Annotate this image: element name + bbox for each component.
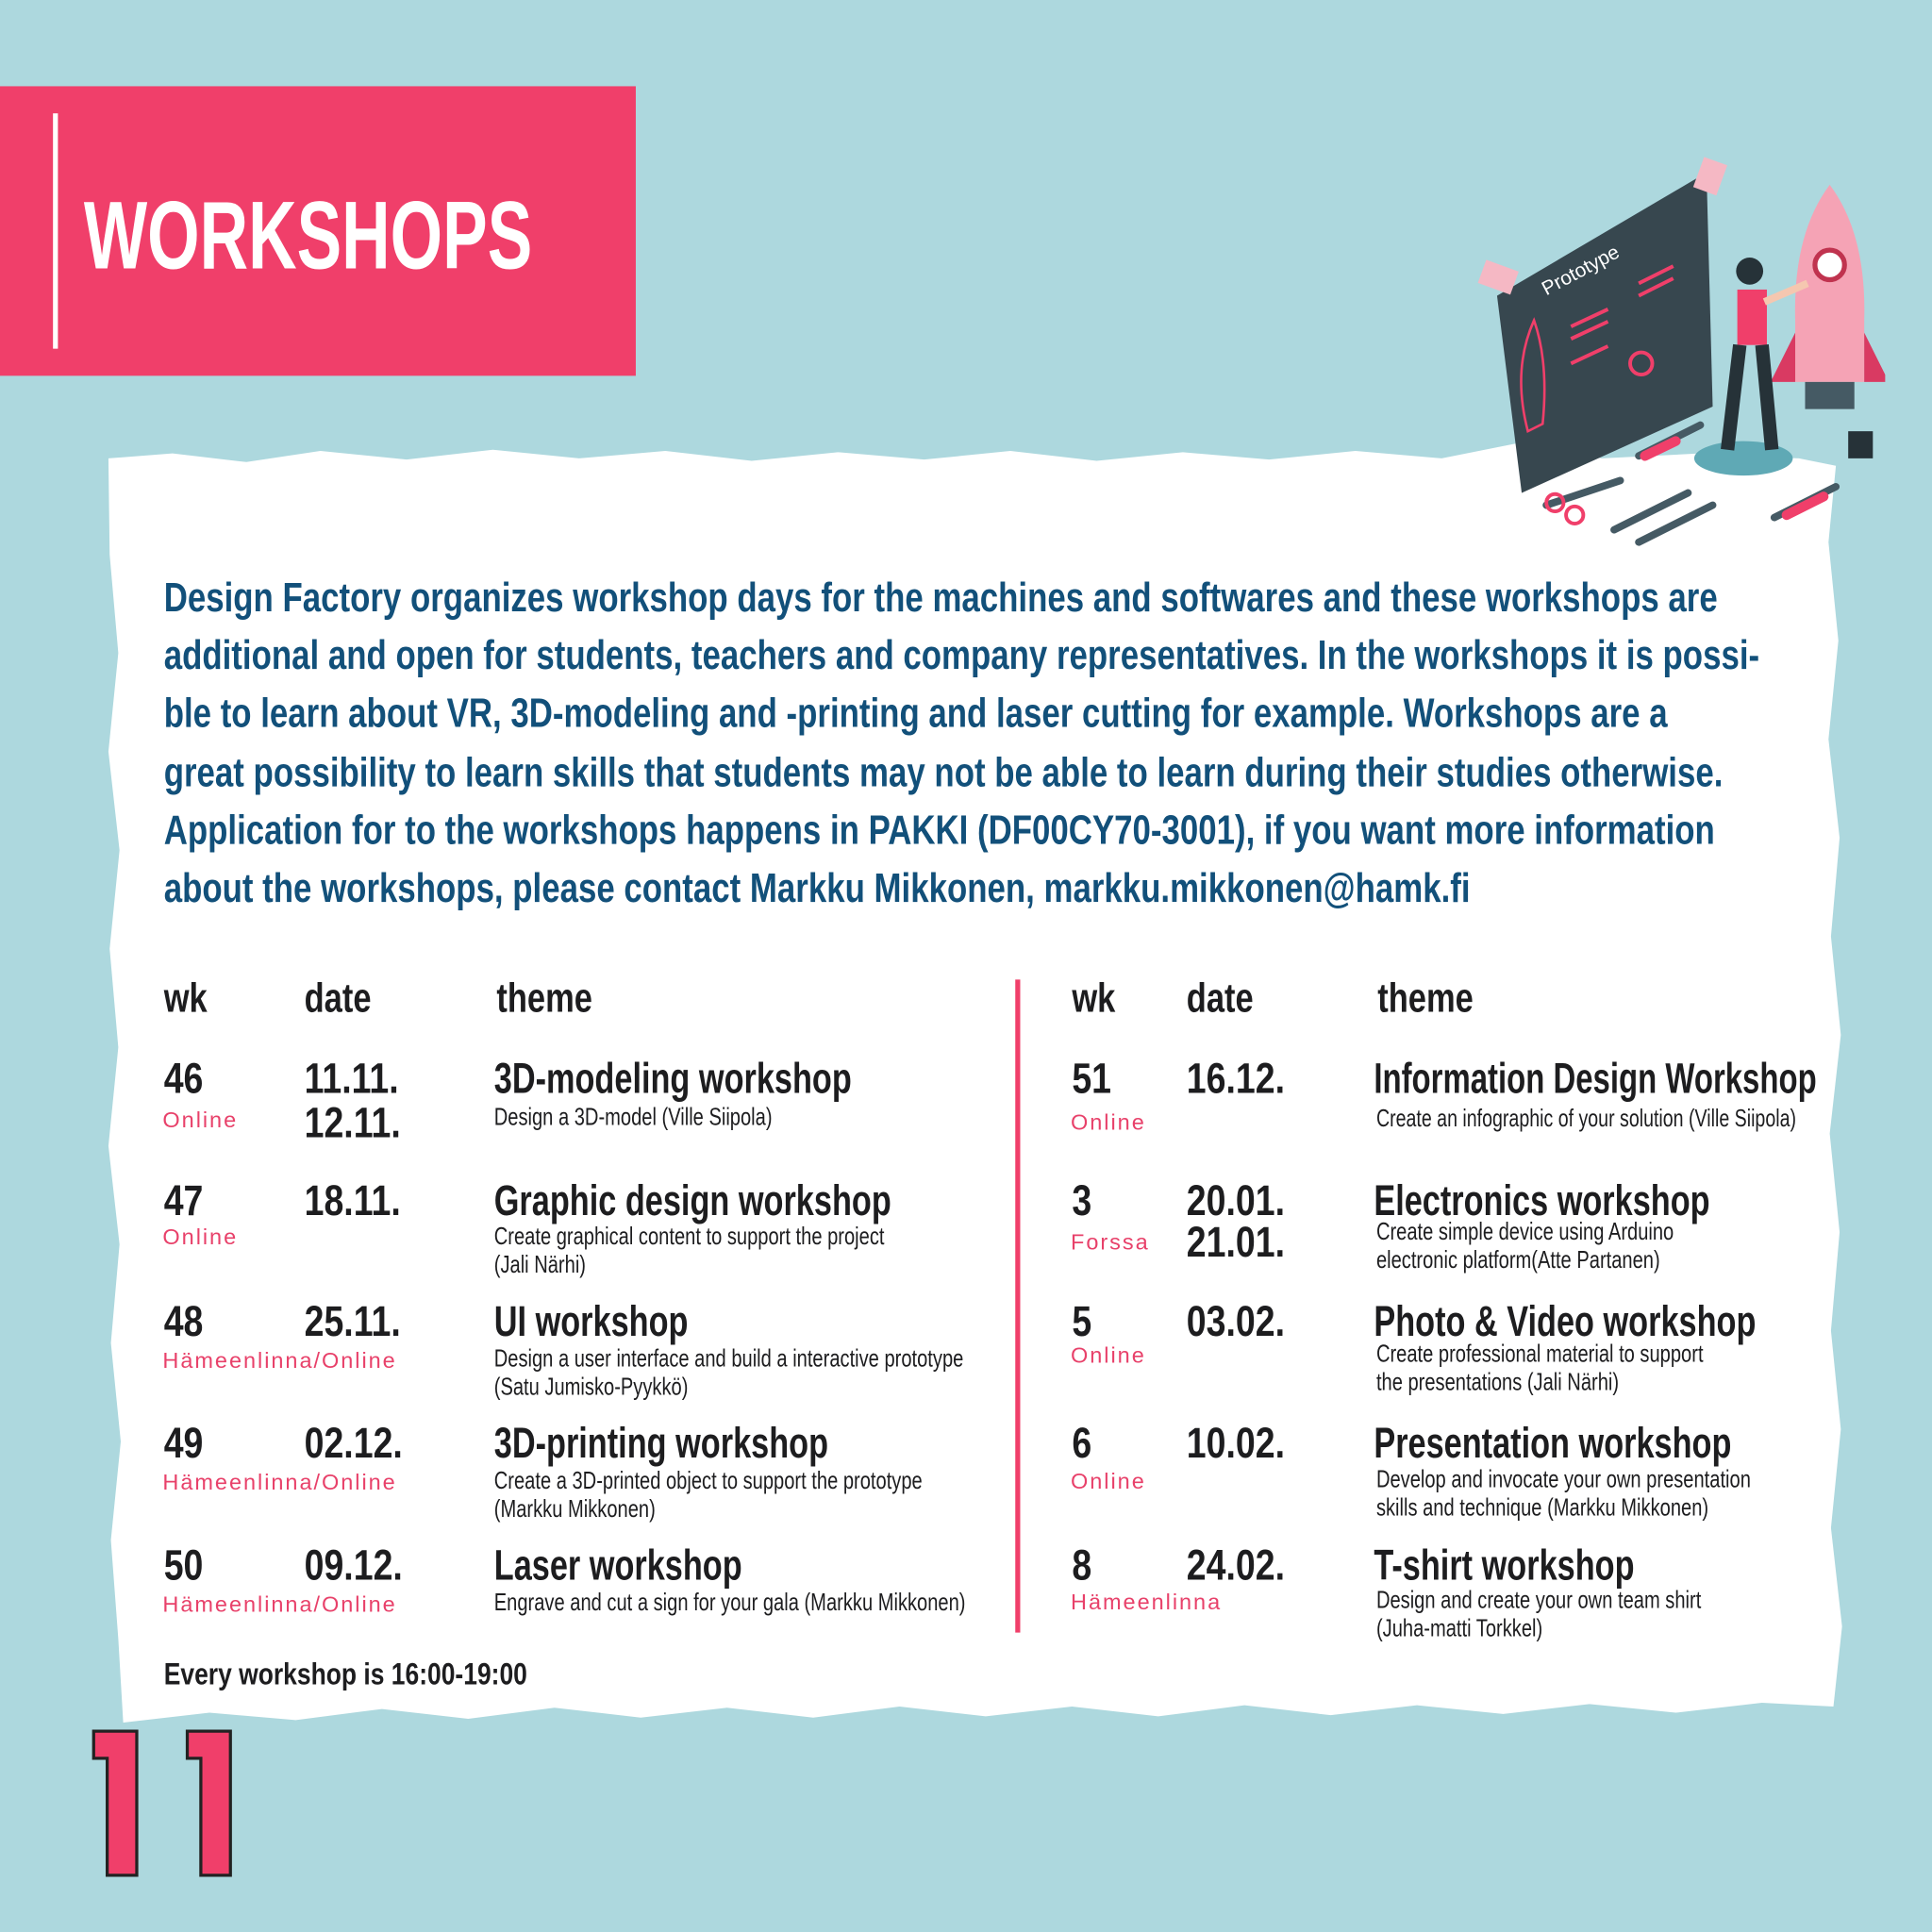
row: 5: 5	[1072, 1297, 1091, 1345]
intro paragraph: about the workshops, please contact Markku Mikkonen, markku.mikkonen@hamk.fi	[164, 865, 1471, 910]
row: 6: Develop and invocate your own presentation	[1376, 1466, 1751, 1493]
row: 48: Hämeenlinna/Online	[162, 1348, 397, 1373]
row: 51: Create an infographic of your solution (Ville Siipola)	[1376, 1106, 1796, 1132]
row: 49: Create a 3D-printed object to support the prototype	[494, 1468, 923, 1494]
row: 5: 03.02.	[1187, 1297, 1285, 1345]
row: 47: Graphic design workshop	[494, 1176, 891, 1224]
row: 48: 25.11.	[305, 1297, 401, 1345]
row: 6: 6	[1072, 1420, 1091, 1468]
row: 5	[1071, 1297, 1756, 1396]
table left: headers: wk	[164, 974, 208, 1020]
row: 49	[162, 1420, 923, 1523]
row: 6: skills and technique (Markku Mikkonen)	[1376, 1494, 1708, 1522]
row: 46: Design a 3D-model (Ville Siipola)	[494, 1104, 773, 1131]
person	[1694, 441, 1792, 475]
row: 47: Create graphical content to support the project	[494, 1224, 884, 1251]
chalkboard	[1497, 173, 1713, 492]
row: 50	[162, 1541, 966, 1617]
intro paragraph: ble to learn about VR, 3D-modeling and -printing and laser cutting for example. Workshops are a	[164, 691, 1668, 736]
table right: headers: date	[1187, 974, 1254, 1020]
row: 3: electronic platform(Atte Partanen)	[1376, 1247, 1660, 1274]
rocket	[1795, 185, 1864, 382]
row: 49: Hämeenlinna/Online	[162, 1470, 397, 1494]
row: 8: Hämeenlinna	[1071, 1590, 1222, 1614]
table left: headers	[164, 974, 592, 1020]
row: 50: Engrave and cut a sign for your gala (Markku Mikkonen)	[494, 1590, 966, 1617]
row: 46: Online	[162, 1108, 238, 1132]
row: 51: Information Design Workshop	[1374, 1055, 1817, 1103]
row: 49: 3D-printing workshop	[494, 1420, 828, 1468]
page number 11	[92, 1730, 232, 1877]
row: 6: Presentation workshop	[1374, 1420, 1731, 1468]
row: 6: Online	[1071, 1469, 1146, 1493]
row: 46: 46	[164, 1055, 203, 1103]
column divider	[1015, 979, 1020, 1633]
row: 8: T-shirt workshop	[1374, 1541, 1635, 1590]
row: 49: 02.12.	[305, 1420, 403, 1468]
row: 49: (Markku Mikkonen)	[494, 1496, 656, 1523]
table right: headers: theme	[1377, 974, 1474, 1020]
tools	[1546, 425, 1836, 542]
row: 47: (Jali Närhi)	[494, 1252, 586, 1279]
row: 51: 16.12.	[1187, 1055, 1285, 1103]
table left: headers: date	[305, 974, 372, 1020]
row: 48: (Satu Jumisko-Pyykkö)	[494, 1374, 688, 1401]
row: 51: 51	[1072, 1055, 1111, 1103]
intro paragraph: Application for to the workshops happens in PAKKI (DF00CY70-3001), if you want more information	[164, 807, 1715, 853]
footnote: Every workshop is 16:00-19:00	[164, 1657, 527, 1691]
row: 47: 18.11.	[305, 1176, 401, 1224]
row: 5: Create professional material to support	[1376, 1341, 1704, 1368]
row: 46	[162, 1055, 852, 1147]
row: 3: Forssa	[1071, 1230, 1150, 1255]
row: 48: UI workshop	[494, 1297, 688, 1345]
row: 3: 21.01.	[1187, 1219, 1285, 1267]
row: 3	[1071, 1176, 1710, 1274]
row: 50: 09.12.	[305, 1541, 403, 1590]
row: 3: 3	[1072, 1176, 1091, 1224]
row: 48	[162, 1297, 963, 1401]
illustration: prototype workshop	[1477, 157, 1885, 546]
row: 47: Online	[162, 1224, 238, 1249]
intro paragraph	[164, 575, 1759, 910]
row: 46: 3D-modeling workshop	[494, 1055, 852, 1103]
row: 50: Hämeenlinna/Online	[162, 1592, 397, 1617]
row: 46: 11.11.	[305, 1055, 399, 1103]
row: 50: 50	[164, 1541, 203, 1590]
row: 49: 49	[164, 1420, 203, 1468]
row: 48: Design a user interface and build a interactive prototype	[494, 1345, 963, 1373]
row: 51	[1071, 1055, 1817, 1135]
row: 50: Laser workshop	[494, 1541, 742, 1590]
table right: headers	[1072, 974, 1474, 1020]
row: 51: Online	[1071, 1110, 1146, 1135]
row: 8: Design and create your own team shirt	[1376, 1587, 1701, 1614]
table left: headers: theme	[496, 974, 592, 1020]
intro paragraph: additional and open for students, teachers and company representatives. In the workshops it is possi-	[164, 632, 1759, 678]
row: 5: Photo & Video workshop	[1374, 1297, 1756, 1345]
row: 3: Electronics workshop	[1374, 1176, 1710, 1224]
header banner	[0, 86, 636, 375]
row: 3: 20.01.	[1187, 1176, 1285, 1224]
table right: headers: wk	[1072, 974, 1115, 1020]
row: 47: 47	[164, 1176, 203, 1224]
row: 8: (Juha-matti Torkkel)	[1376, 1615, 1542, 1642]
row: 5: the presentations (Jali Närhi)	[1376, 1369, 1619, 1396]
row: 6: 10.02.	[1187, 1420, 1285, 1468]
illustration: prototype workshop: Prototype	[1539, 242, 1623, 300]
row: 47	[162, 1176, 891, 1279]
intro paragraph: Design Factory organizes workshop days for the machines and softwares and these workshops are	[164, 575, 1718, 620]
row: 5: Online	[1071, 1343, 1146, 1368]
row: 48: 48	[164, 1297, 203, 1345]
header accent line	[53, 113, 58, 349]
row: 8: 24.02.	[1187, 1541, 1285, 1590]
row: 6	[1071, 1420, 1751, 1522]
row: 3: Create simple device using Arduino	[1376, 1219, 1674, 1245]
row: 46: 12.11.	[305, 1099, 401, 1147]
row: 8: 8	[1072, 1541, 1091, 1590]
intro paragraph: great possibility to learn skills that students may not be able to learn during their studies otherwise.	[164, 749, 1723, 794]
title: WORKSHOPS	[84, 181, 532, 290]
row: 8	[1071, 1541, 1702, 1642]
